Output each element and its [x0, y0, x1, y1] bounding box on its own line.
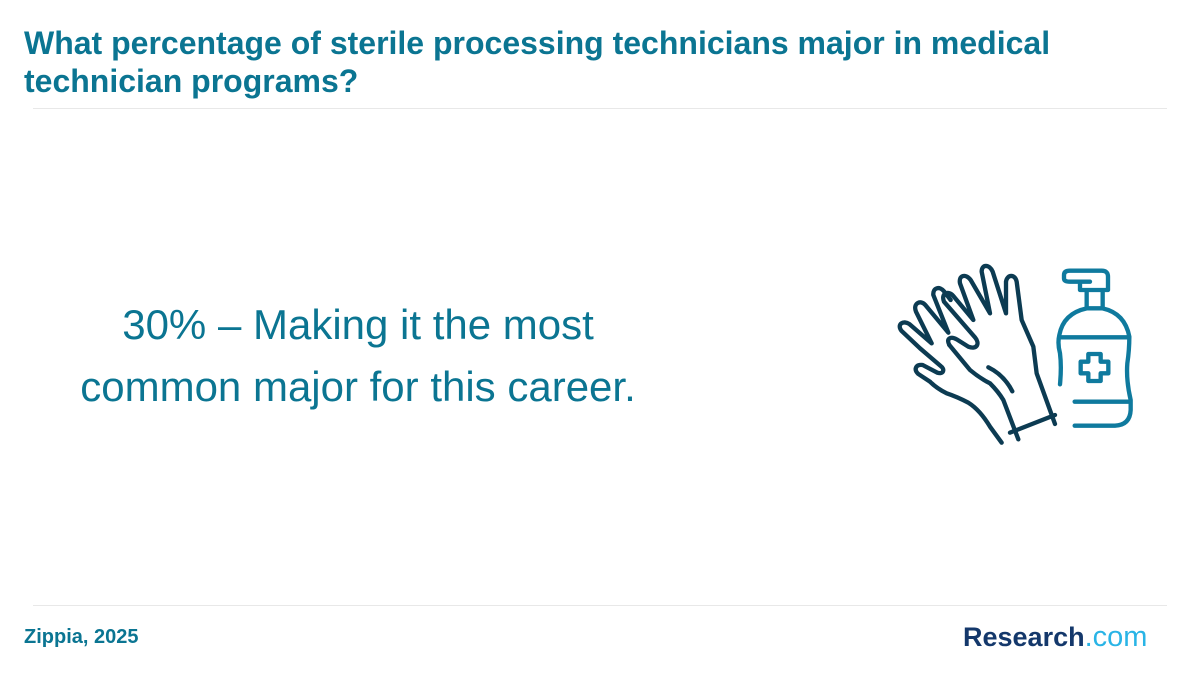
- icon: sanitizer bottle: [1058, 271, 1131, 426]
- main statement: 30% – Making it the most: [122, 301, 594, 348]
- title: [24, 25, 1050, 99]
- icon: gloves: [900, 266, 1055, 443]
- title: What percentage of sterile processing technicians major in medical: [24, 25, 1050, 61]
- main statement: [80, 301, 636, 410]
- title: technician programs?: [24, 63, 358, 99]
- icon: gloves and sanitizer bottle: [898, 264, 1133, 445]
- source: Zippia, 2025: [24, 626, 138, 648]
- main statement: common major for this career.: [80, 363, 636, 410]
- logo: Research.com: [963, 621, 1147, 653]
